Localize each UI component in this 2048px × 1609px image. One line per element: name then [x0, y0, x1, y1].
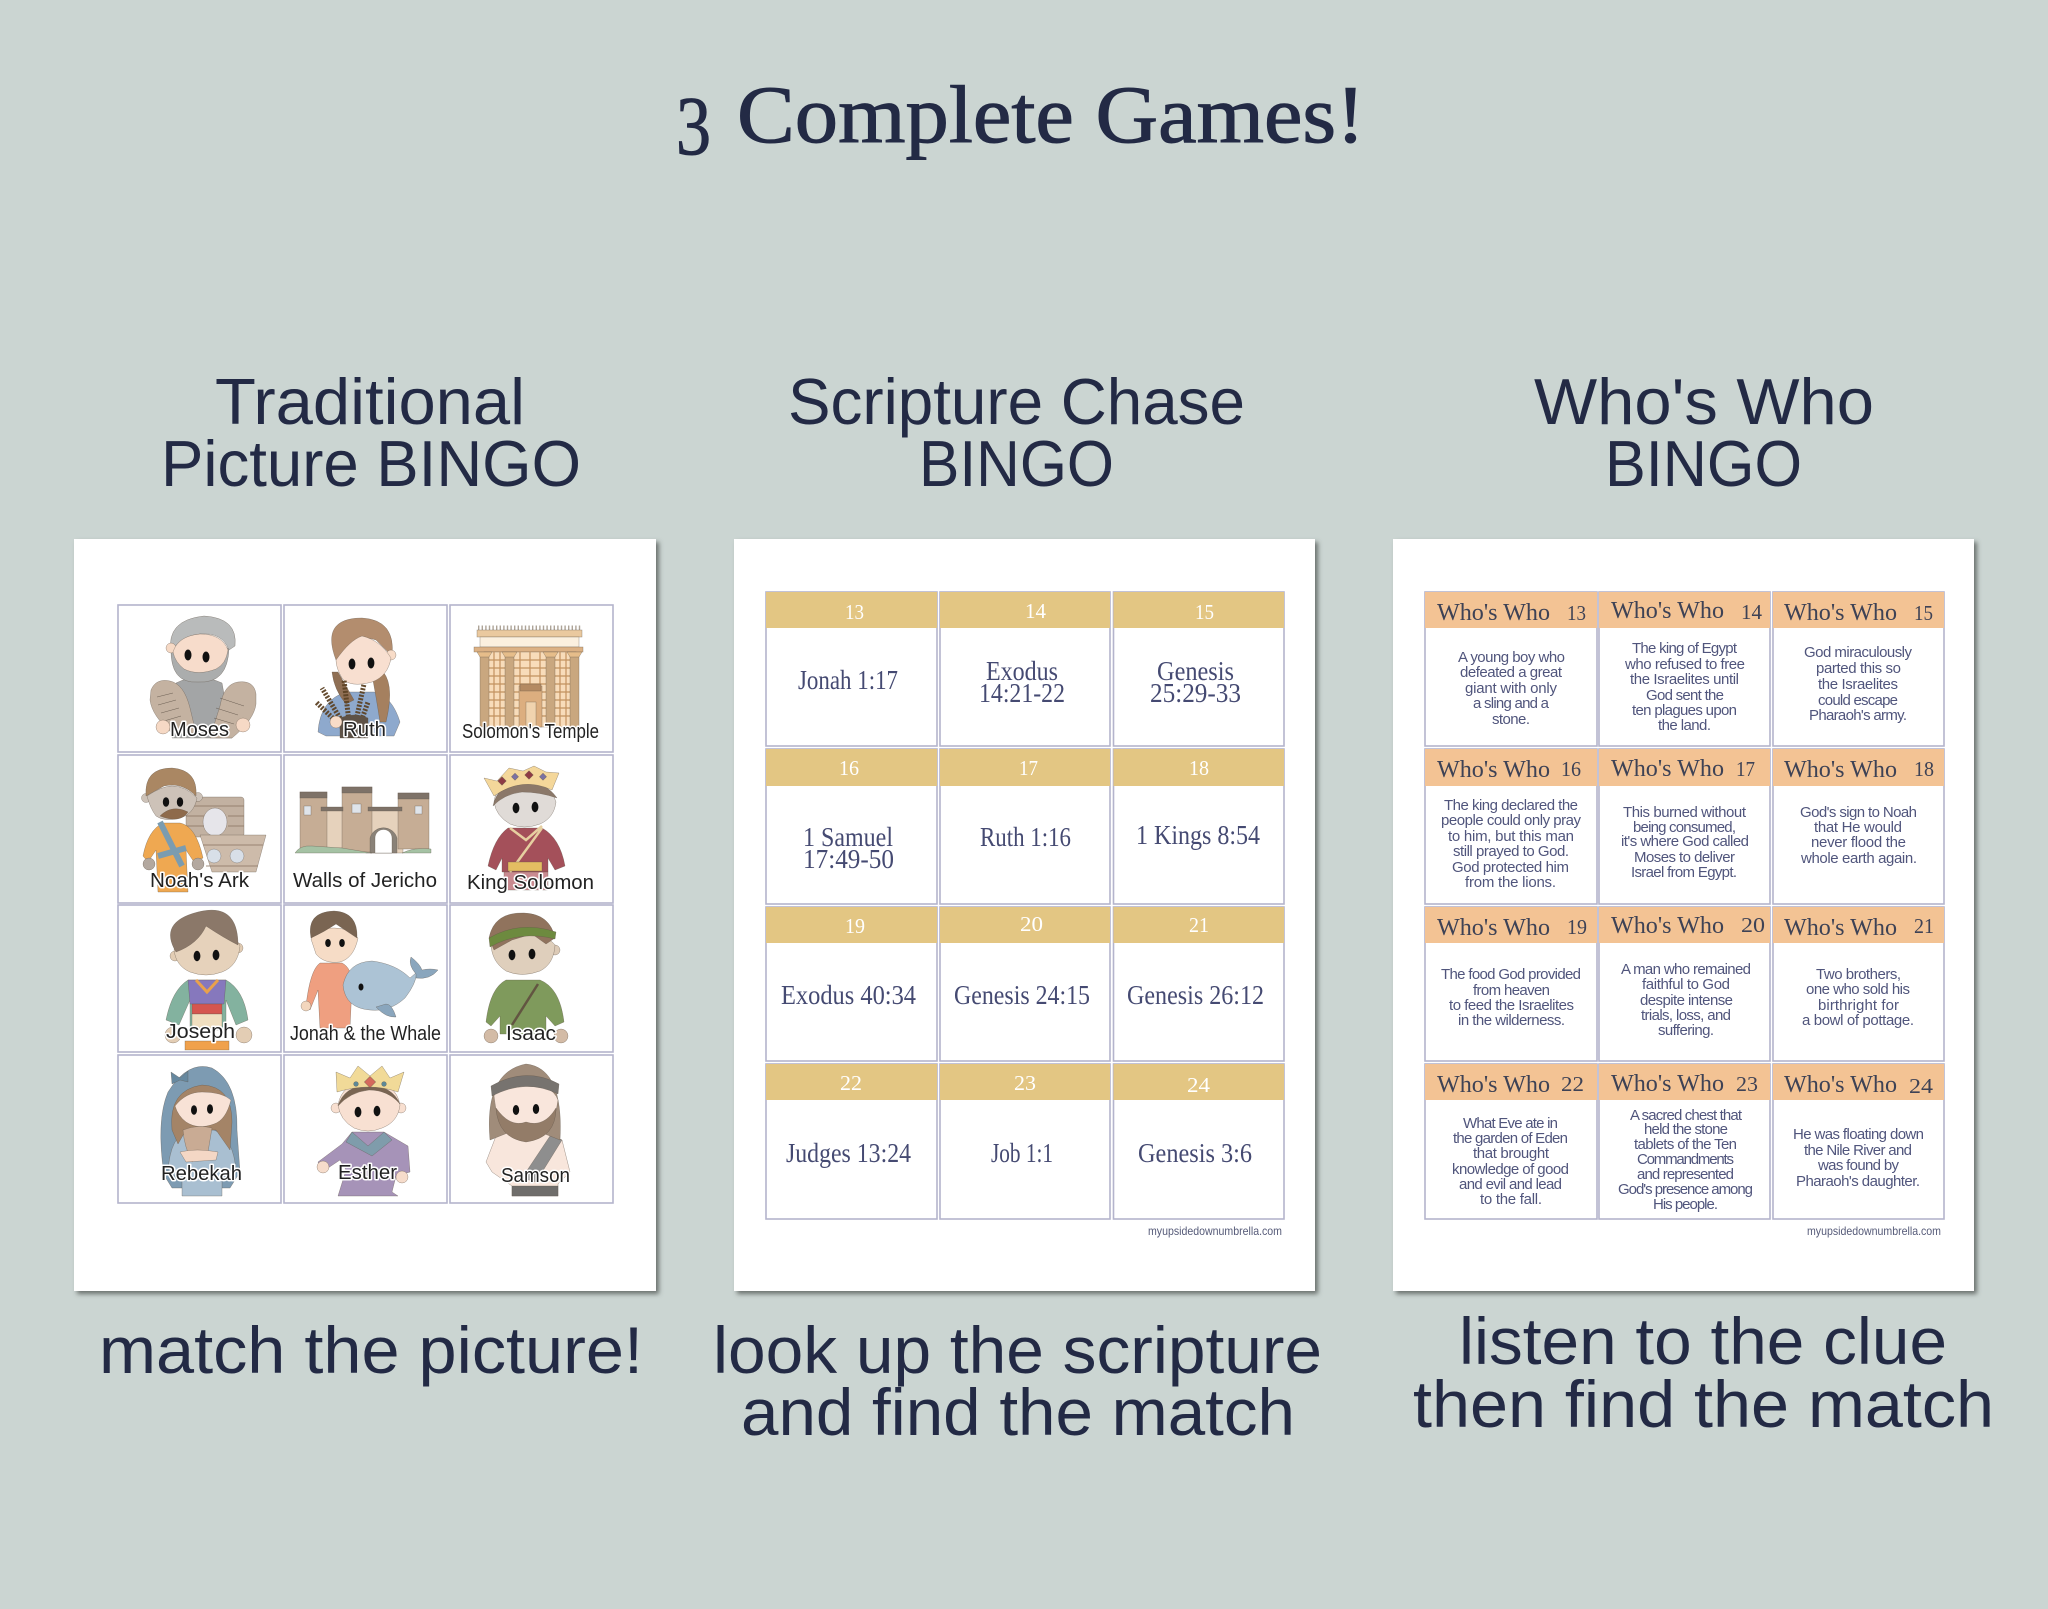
- panel: scripture chase bingo sheet: [734, 539, 1315, 1291]
- clues row 1: the land.: [1658, 717, 1711, 734]
- scripture card numbers: [839, 599, 1214, 1097]
- clues row 1: the Israelites: [1818, 676, 1898, 693]
- heading: Scripture Chase BINGO: BINGO: [919, 427, 1114, 500]
- heading: Who's Who BINGO: Who's Who: [1534, 365, 1874, 438]
- card: Rebekah: [118, 1055, 281, 1203]
- caption: match the picture: match the picture!: [99, 1313, 643, 1387]
- scripture references: Exodus 40:34: [781, 980, 916, 1010]
- who's who card headers: Who's Who: [1437, 915, 1550, 941]
- clues row 3: suffering.: [1658, 1022, 1714, 1039]
- who's who card headers: 14: [1741, 600, 1762, 624]
- who's who card headers: 15: [1914, 601, 1933, 625]
- who's who card headers: 19: [1567, 915, 1587, 939]
- card: King Solomon: [450, 755, 613, 903]
- card: Solomon's Temple: Solomon's Temple: [462, 721, 599, 743]
- clues row 4: the garden of Eden: [1453, 1130, 1568, 1147]
- clues row 3: in the wilderness.: [1458, 1012, 1565, 1029]
- clues row 3: birthright for: [1818, 997, 1899, 1014]
- card: Rebekah: Rebekah: [161, 1163, 242, 1185]
- card: Jonah and the Whale: Jonah & the Whale: [290, 1023, 441, 1045]
- clues row 2: to him, but this man: [1448, 828, 1574, 845]
- who's who card headers: 23: [1736, 1072, 1758, 1096]
- who's who card headers: Who's Who: [1611, 1071, 1724, 1097]
- clues row 4: and evil and lead: [1459, 1176, 1562, 1193]
- clues row 2: God protected him: [1452, 859, 1569, 876]
- website credit: myupsidedownumbrella.com: [1148, 1224, 1282, 1238]
- panel: who's who bingo sheet: [1393, 539, 1974, 1291]
- clues row 2: Moses to deliver: [1634, 849, 1735, 866]
- clues row 2: [1441, 797, 1917, 891]
- card: Esther: [284, 1055, 447, 1203]
- scripture card numbers: 13: [845, 600, 864, 624]
- card: Solomon's Temple: [450, 605, 613, 752]
- clues row 4: to the fall.: [1480, 1191, 1542, 1208]
- clues row 4: was found by: [1817, 1157, 1900, 1174]
- scripture card grid outlines and gold headers: [766, 592, 1284, 1219]
- scripture references: 1 Kings 8:54: [1136, 820, 1260, 850]
- scripture references: [781, 656, 1264, 1168]
- clues row 4: A sacred chest that: [1630, 1107, 1743, 1124]
- scripture references: Genesis 24:15: [954, 980, 1090, 1010]
- card: Ruth: [284, 605, 447, 752]
- panel: traditional picture bingo sheet: [74, 539, 656, 1291]
- who's who card headers: Who's Who: [1611, 598, 1724, 624]
- scripture card numbers: 16: [839, 756, 859, 780]
- who's who card headers: Who's Who: [1437, 1072, 1550, 1098]
- scripture card numbers: 24: [1187, 1073, 1211, 1097]
- clues row 3: The food God provided: [1441, 966, 1581, 983]
- card: Walls of Jericho: Walls of Jericho: [293, 870, 437, 892]
- heading: Who's Who BINGO: [1534, 365, 1874, 500]
- clues row 3: from heaven: [1473, 982, 1550, 999]
- clues row 1: ten plagues upon: [1632, 702, 1737, 719]
- clues row 4: that brought: [1473, 1145, 1550, 1162]
- card: Moses: [118, 605, 281, 752]
- card: Joseph: [118, 905, 281, 1052]
- who's who card headers: 24: [1909, 1074, 1934, 1098]
- caption: listen to the clue: listen to the clue: [1459, 1304, 1947, 1378]
- scripture references: Genesis: [1157, 656, 1234, 686]
- card: Samson: [450, 1055, 613, 1203]
- scripture card numbers: 15: [1195, 600, 1214, 624]
- who's who card headers: Who's Who: [1611, 913, 1724, 939]
- who's who card headers: 18: [1914, 757, 1934, 781]
- clues row 1: defeated a great: [1460, 664, 1563, 681]
- who's who card headers: 17: [1736, 757, 1755, 781]
- clues row 3: [1441, 961, 1914, 1039]
- scripture card numbers: 18: [1189, 756, 1209, 780]
- who's who card headers: 21: [1914, 914, 1934, 938]
- clues row 3: faithful to God: [1642, 976, 1730, 993]
- clues row 4: He was floating down: [1793, 1126, 1924, 1143]
- clues row 1: Pharaoh's army.: [1809, 707, 1907, 724]
- who's who card headers: 20: [1741, 913, 1765, 937]
- clues row 4: the Nile River and: [1804, 1142, 1912, 1159]
- clues row 3: a bowl of pottage.: [1802, 1012, 1914, 1029]
- scripture card numbers: 22: [840, 1071, 862, 1095]
- card: Joseph: Joseph: [166, 1021, 235, 1043]
- card: Esther: Esther: [338, 1162, 397, 1184]
- clues row 1: stone.: [1492, 711, 1530, 728]
- who's who card headers: Who's Who: [1784, 757, 1897, 783]
- clues row 1: A young boy who: [1458, 649, 1565, 666]
- clues row 2: people could only pray: [1441, 812, 1582, 829]
- heading: Traditional Picture BINGO: Picture BINGO: [161, 427, 581, 500]
- clues row 3: despite intense: [1640, 992, 1733, 1009]
- clues row 4: and represented: [1637, 1166, 1734, 1183]
- caption: listen to the clue: [1413, 1304, 1994, 1441]
- caption: look up the scripture: look up the scripture: [713, 1313, 1322, 1387]
- clues row 3: one who sold his: [1806, 981, 1910, 998]
- scripture references: Job 1:1: [991, 1138, 1053, 1168]
- caption: listen to the clue: then find the match: [1413, 1367, 1994, 1441]
- heading: Scripture Chase BINGO: [788, 365, 1245, 500]
- clues row 2: never flood the: [1811, 834, 1906, 851]
- clues row 4: held the stone: [1644, 1121, 1728, 1138]
- who's who card headers: 13: [1567, 601, 1586, 625]
- heading: Traditional Picture BINGO: Traditional: [215, 365, 525, 438]
- scripture card numbers: 17: [1019, 756, 1038, 780]
- clues row 2: Israel from Egypt.: [1631, 864, 1737, 881]
- card: Isaac: [450, 905, 613, 1052]
- clues row 2: still prayed to God.: [1453, 843, 1569, 860]
- clues row 2: The king declared the: [1444, 797, 1578, 814]
- heading: Who's Who BINGO: BINGO: [1605, 427, 1802, 500]
- clues row 3: to feed the Israelites: [1449, 997, 1574, 1014]
- scripture references: 1 Samuel: [803, 822, 893, 852]
- caption: look up the scripture: [713, 1313, 1322, 1449]
- scripture references: Jonah 1:17: [798, 665, 898, 695]
- card: Noah's Ark: [118, 755, 281, 903]
- clues row 4: tablets of the Ten: [1634, 1136, 1737, 1153]
- scripture references: Genesis 26:12: [1127, 980, 1264, 1010]
- clues row 3: Two brothers,: [1816, 966, 1901, 983]
- card: Moses: Moses: [170, 719, 229, 741]
- scripture card numbers: 21: [1189, 913, 1209, 937]
- clues row 4: Pharaoh's daughter.: [1796, 1173, 1920, 1190]
- scripture references: Exodus: [986, 656, 1058, 686]
- heading: Scripture Chase BINGO: Scripture Chase: [788, 365, 1245, 438]
- clues row 2: God's sign to Noah: [1800, 804, 1917, 821]
- clues row 2: that He would: [1814, 819, 1902, 836]
- who's who card headers: Who's Who: [1784, 600, 1897, 626]
- who's who card headers: Who's Who: [1437, 600, 1550, 626]
- clues row 1: parted this so: [1816, 660, 1901, 677]
- who's who card headers: Who's Who: [1437, 757, 1550, 783]
- clues row 1: [1458, 640, 1912, 734]
- card: King Solomon: King Solomon: [467, 872, 594, 894]
- clues row 2: This burned without: [1623, 804, 1747, 821]
- title: 3: [676, 80, 711, 173]
- clues row 1: the Israelites until: [1630, 671, 1739, 688]
- heading: Traditional Picture BINGO: [161, 365, 581, 500]
- clues row 2: it's where God called: [1621, 833, 1749, 850]
- clues row 1: who refused to free: [1624, 656, 1745, 673]
- who's who card headers: Who's Who: [1611, 756, 1724, 782]
- card: Samson: Samson: [501, 1165, 570, 1187]
- clues row 4: His people.: [1653, 1196, 1718, 1213]
- clues row 2: from the lions.: [1465, 874, 1556, 891]
- title: Complete Games!: [737, 69, 1365, 160]
- card: Noah's Ark: Noah's Ark: [150, 870, 250, 892]
- scripture references: Ruth 1:16: [980, 822, 1071, 852]
- clues row 4: God's presence among: [1618, 1181, 1753, 1198]
- clues row 1: giant with only: [1465, 680, 1558, 697]
- clues row 3: A man who remained: [1621, 961, 1751, 978]
- card: Ruth: Ruth: [343, 719, 386, 741]
- who's who card headers: [1437, 598, 1934, 1098]
- clues row 1: God sent the: [1646, 687, 1724, 704]
- clues row 2: whole earth again.: [1800, 850, 1917, 867]
- scripture references: 14:21-22: [979, 678, 1065, 708]
- who's who card headers: 22: [1561, 1072, 1584, 1096]
- scripture references: 17:49-50: [803, 844, 894, 874]
- card: Isaac: Isaac: [506, 1023, 556, 1045]
- clues row 1: The king of Egypt: [1632, 640, 1738, 657]
- clues row 1: a sling and a: [1473, 695, 1550, 712]
- caption: look up the scripture: and find the match: [741, 1375, 1295, 1449]
- scripture card numbers: 14: [1025, 599, 1046, 623]
- clues row 2: being consumed,: [1633, 819, 1736, 836]
- who's who card grid outlines and peach headers: [1425, 592, 1944, 1219]
- clues row 4: knowledge of good: [1452, 1161, 1569, 1178]
- card: Jonah and the Whale: [284, 905, 447, 1052]
- clues row 1: God miraculously: [1804, 644, 1912, 661]
- scripture card numbers: 23: [1014, 1071, 1036, 1095]
- clues row 1: could escape: [1818, 692, 1898, 709]
- clues row 4: What Eve ate in: [1463, 1115, 1558, 1132]
- who's who card headers: Who's Who: [1784, 1072, 1897, 1098]
- card: Walls of Jericho: [284, 755, 447, 903]
- scripture references: Genesis 3:6: [1138, 1138, 1252, 1168]
- clues row 4: [1452, 1107, 1924, 1213]
- clues row 4: Commandments: [1637, 1151, 1734, 1168]
- website credit: myupsidedownumbrella.com: [1807, 1224, 1941, 1238]
- scripture card numbers: 20: [1020, 912, 1043, 936]
- scripture card numbers: 19: [845, 914, 865, 938]
- scripture references: 25:29-33: [1150, 678, 1241, 708]
- scripture references: Judges 13:24: [786, 1138, 911, 1168]
- clues row 3: trials, loss, and: [1641, 1007, 1731, 1024]
- who's who card headers: Who's Who: [1784, 915, 1897, 941]
- who's who card headers: 16: [1561, 757, 1581, 781]
